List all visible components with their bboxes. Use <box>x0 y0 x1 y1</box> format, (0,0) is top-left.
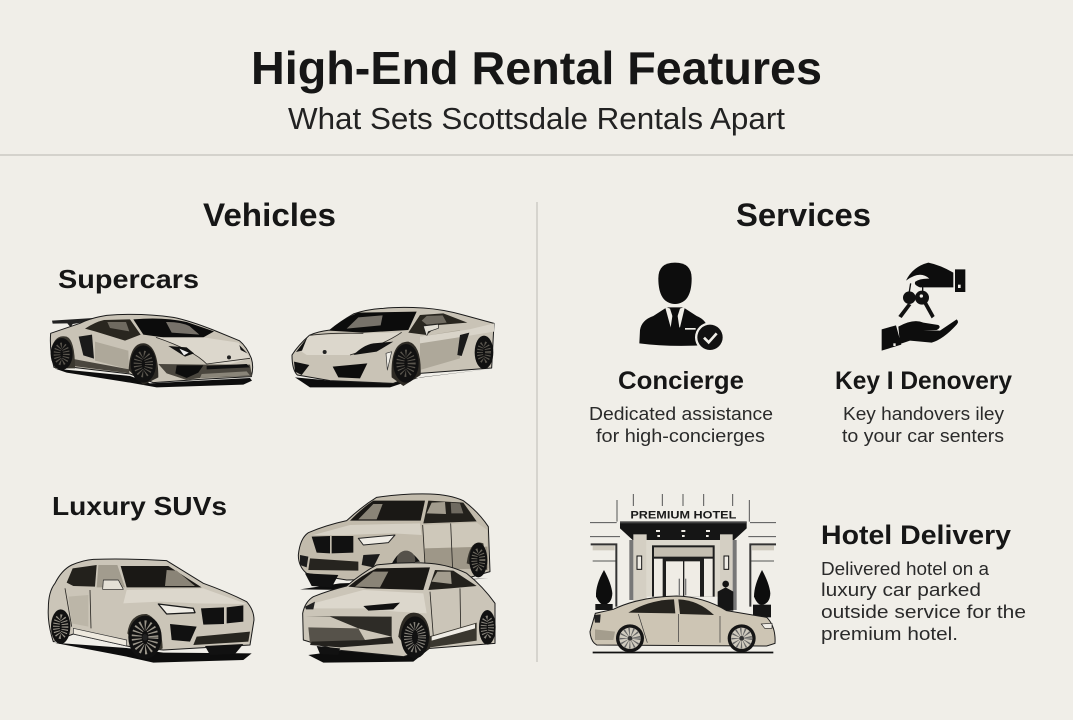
icon: key handover <box>882 263 965 351</box>
illustration: premium hotel with car <box>590 494 776 653</box>
car: rear suv <box>298 494 490 590</box>
text: hotel delivery: premium hotel. <box>821 624 958 644</box>
panel: services <box>589 197 1026 653</box>
text: concierge: for high-concierges <box>596 426 765 446</box>
car: urus suv <box>303 563 496 663</box>
text: concierge <box>589 367 773 446</box>
text: hotel delivery: outside service for the <box>821 602 1026 622</box>
heading: vehicles: Vehicles <box>203 197 336 233</box>
text: key delivery <box>835 367 1012 446</box>
text: key delivery: Key handovers iley <box>843 404 1004 424</box>
heading: luxury suvs: Luxury SUVs <box>52 491 227 521</box>
panel: vehicles <box>48 197 496 663</box>
car: x3 suv <box>48 559 254 663</box>
heading: services: Services <box>736 197 871 233</box>
subtitle: What Sets Scottsdale Rentals Apart <box>288 101 785 136</box>
text: hotel delivery <box>821 520 1026 644</box>
text: key delivery: to your car senters <box>842 426 1004 446</box>
text: concierge: Concierge <box>618 367 744 395</box>
heading: supercars: Supercars <box>58 264 199 294</box>
car: gallardo supercar <box>292 307 494 387</box>
text: hotel delivery: Delivered hotel on a <box>821 559 990 579</box>
text: concierge: Dedicated assistance <box>589 404 773 424</box>
title: High-End Rental Features <box>251 42 822 94</box>
car: aventador supercar <box>50 314 253 387</box>
icon: concierge with check badge <box>639 263 725 352</box>
text: key delivery: Key I Denovery <box>835 367 1012 395</box>
illustration: premium hotel with car: PREMIUM HOTEL <box>630 510 736 522</box>
text: hotel delivery: luxury car parked <box>821 580 981 600</box>
text: hotel delivery: Hotel Delivery <box>821 520 1011 550</box>
